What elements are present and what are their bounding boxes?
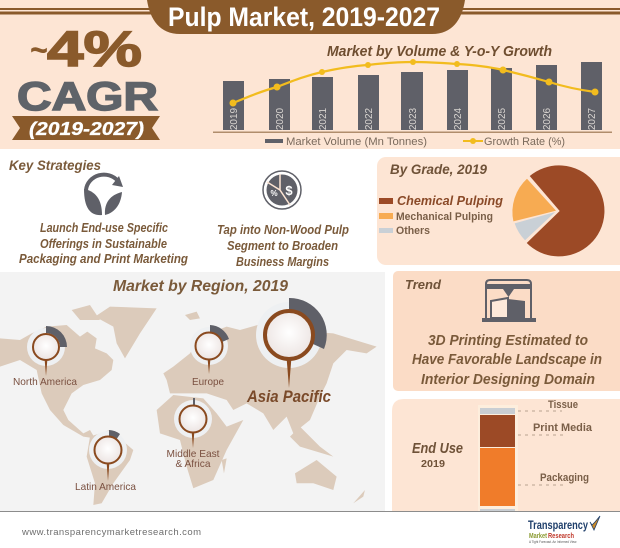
labels (533, 399, 593, 484)
label: Europe (192, 376, 224, 388)
year labels: 2021 (318, 107, 329, 130)
strategy text one: Launch End-use Specific (40, 220, 169, 235)
panel: by grade (377, 157, 620, 265)
icon: non-wood pulp coin (263, 171, 301, 209)
decorative header rules (0, 8, 620, 14)
trend text: 3D Printing Estimated to (428, 332, 588, 349)
legend: Mechanical Pulping (396, 211, 493, 223)
growth line (230, 59, 598, 106)
labels: Print Media (533, 422, 593, 434)
panel: end use (392, 399, 620, 511)
logo: Research (548, 533, 574, 540)
strategy text one: Packaging and Print Marketing (19, 251, 188, 266)
heading: Market by Region, 2019 (113, 278, 288, 295)
legend (379, 193, 503, 237)
pin: North America (27, 326, 67, 376)
legend (265, 136, 565, 148)
trend text: Have Favorable Landscape in (412, 351, 602, 368)
year labels (229, 107, 598, 130)
panel: top header background (0, 0, 620, 149)
icon: non-wood pulp coin: $ (285, 183, 293, 198)
strategy text one: Offerings in Sustainable (40, 236, 167, 251)
labels: Packaging (540, 472, 589, 484)
trend text (412, 332, 602, 388)
legend: Growth Rate (%) (484, 136, 565, 148)
label: Middle East (166, 448, 220, 460)
label (166, 448, 220, 470)
CAGR callout: CAGR (17, 75, 158, 119)
legend: Others (396, 225, 430, 237)
pin: Latin America (89, 430, 127, 481)
heading: 2019 (421, 458, 445, 470)
year labels: 2027 (587, 107, 598, 130)
CAGR callout: ~ (30, 29, 48, 70)
label: Latin America (75, 481, 136, 493)
pin: Asia Pacific (256, 298, 327, 388)
panel: trend (393, 271, 620, 391)
label: Asia Pacific (246, 388, 331, 406)
icon: leaf cycle (84, 175, 123, 215)
heading: End Use (412, 441, 463, 457)
heading (412, 441, 463, 470)
logo: Transparency (528, 520, 588, 532)
heading: Trend (405, 277, 442, 292)
footer url: www.transparencymarketresearch.com (21, 527, 201, 538)
year labels: 2019 (229, 107, 240, 130)
chart: market by volume and growth (213, 43, 612, 148)
chart title: Market by Volume & Y-o-Y Growth (327, 43, 552, 60)
world map (0, 305, 377, 505)
year labels: 2025 (497, 107, 508, 130)
leaders (518, 411, 566, 485)
trend text: Interior Designing Domain (421, 371, 595, 388)
title: Pulp Market, 2019-2027 (168, 2, 440, 32)
strategy text one (19, 220, 188, 266)
heading: Key Strategies (9, 157, 101, 173)
panel: market by region (0, 272, 385, 511)
stacked bar (478, 405, 518, 511)
label: & Africa (176, 458, 211, 470)
icon: 3D printer (482, 280, 536, 322)
strategy text two (217, 222, 349, 269)
year labels: 2024 (453, 107, 464, 130)
label: North America (13, 376, 77, 388)
legend: Chemical Pulping (397, 193, 503, 208)
pie chart (512, 165, 605, 257)
logo: A Tight Forecast. An Informed View. (529, 540, 577, 544)
year labels: 2022 (364, 107, 375, 130)
year labels: 2020 (275, 107, 286, 130)
year labels: 2026 (542, 107, 553, 130)
CAGR callout: 4% (47, 21, 142, 77)
strategy text two: Segment to Broaden (227, 238, 338, 253)
heading: By Grade, 2019 (390, 161, 487, 177)
strategy text two: Tap into Non-Wood Pulp (217, 222, 349, 237)
logo (528, 516, 600, 544)
panel: key strategies (9, 157, 349, 269)
legend: Market Volume (Mn Tonnes) (286, 136, 427, 148)
pin: Europe (190, 325, 229, 374)
axis (213, 132, 612, 133)
CAGR callout: (2019-2027) (29, 119, 144, 139)
bars (223, 62, 602, 130)
strategy text two: Business Margins (236, 254, 329, 269)
icon: non-wood pulp coin: % (270, 189, 278, 198)
year labels: 2023 (408, 107, 419, 130)
pin: Middle East and Africa (174, 398, 212, 448)
CAGR callout (12, 21, 160, 140)
footer rule (0, 511, 620, 512)
labels: Tissue (548, 399, 578, 411)
logo: Market (529, 533, 548, 540)
